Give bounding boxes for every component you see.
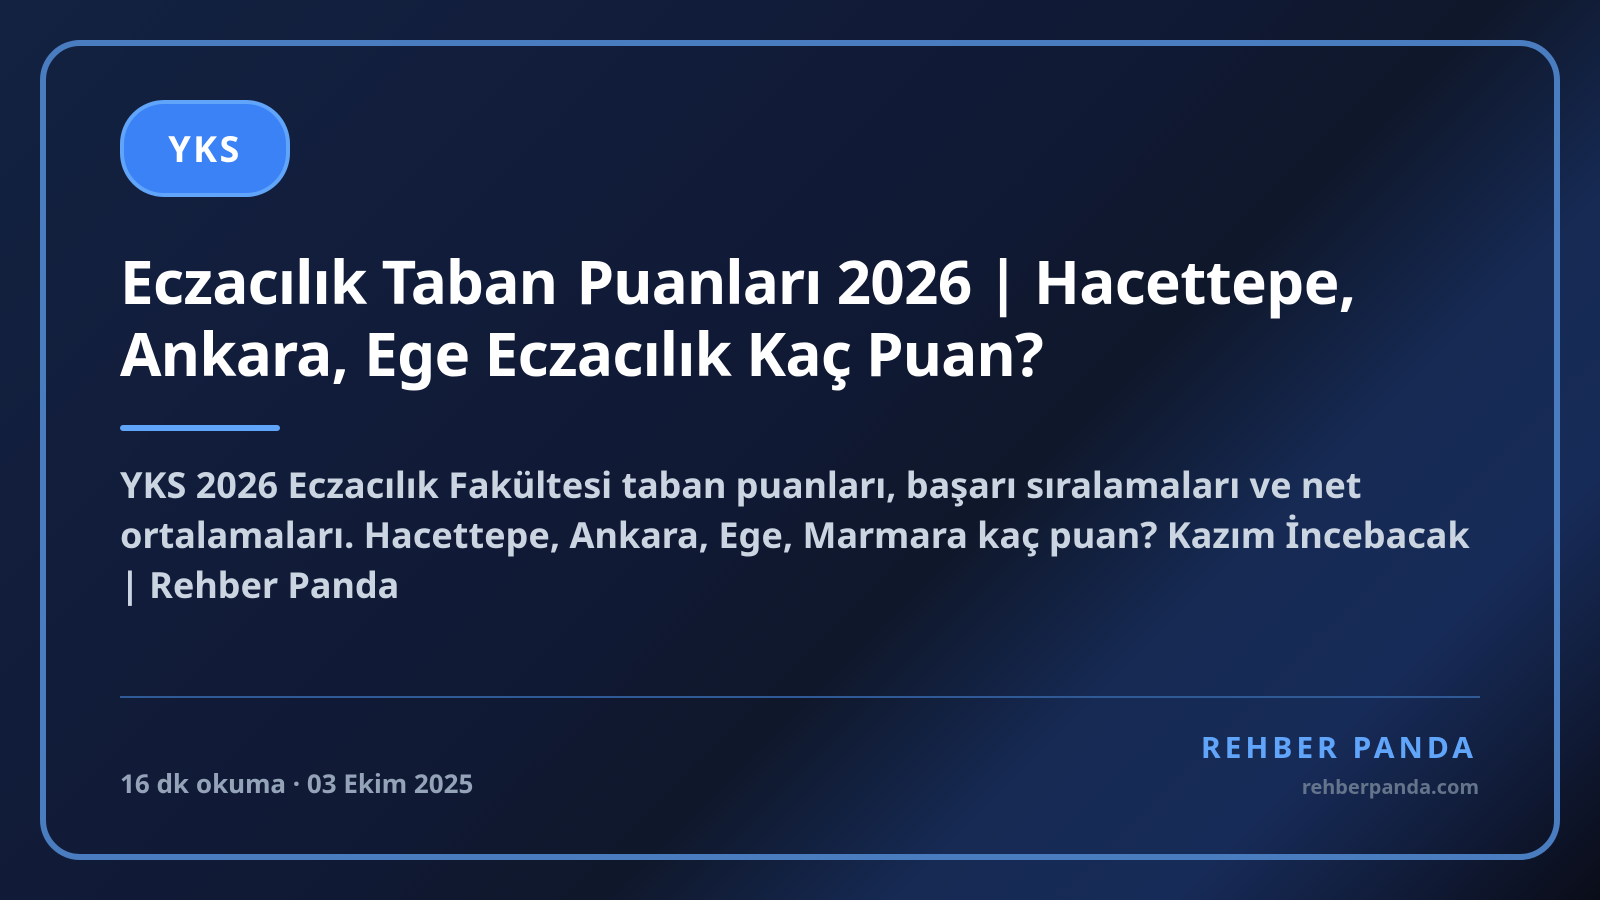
description — [120, 460, 1470, 609]
brand block — [1201, 726, 1479, 800]
brand name: REHBER PANDA — [1201, 726, 1477, 767]
description: | Rehber Panda — [120, 560, 399, 609]
accent rule — [120, 425, 280, 431]
brand url: rehberpanda.com — [1302, 773, 1479, 800]
title: Ankara, Ege Eczacılık Kaç Puan? — [120, 312, 1043, 394]
description: ortalamaları. Hacettepe, Ankara, Ege, Marmara kaç puan? Kazım İncebacak — [120, 510, 1470, 559]
badge: YKS — [120, 100, 290, 197]
reading time and date: 16 dk okuma · 03 Ekim 2025 — [120, 765, 473, 801]
description: YKS 2026 Eczacılık Fakültesi taban puanları, başarı sıralamaları ve net — [120, 460, 1362, 509]
badge: YKS: YKS — [168, 124, 242, 173]
footer divider — [120, 696, 1480, 698]
title: Eczacılık Taban Puanları 2026 | Hacettepe, — [120, 240, 1355, 322]
title — [120, 240, 1355, 394]
